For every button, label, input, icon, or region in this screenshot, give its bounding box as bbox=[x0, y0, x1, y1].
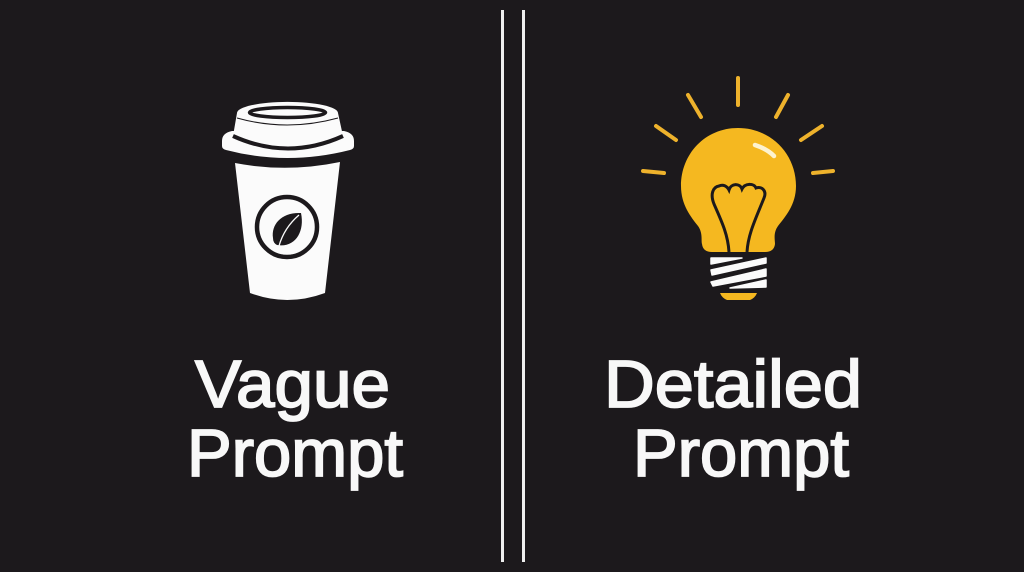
leaf vein bbox=[279, 215, 299, 246]
bulb rays bbox=[643, 78, 833, 173]
center divider: double vertical line bbox=[501, 10, 525, 562]
heading: Prompt (right): Prompt bbox=[633, 416, 849, 491]
heading: Vague: Vague bbox=[195, 347, 390, 422]
heading: Detailed: Detailed bbox=[604, 347, 862, 422]
cup brim bbox=[222, 131, 354, 158]
bulb filament bbox=[712, 184, 765, 252]
icon: coffee cup bbox=[222, 102, 354, 300]
icon: light bulb bbox=[643, 78, 833, 300]
bulb tip bbox=[720, 293, 757, 300]
icon: coffee leaf bbox=[273, 213, 302, 245]
lid rim line bbox=[237, 118, 338, 125]
cup badge ring bbox=[257, 197, 317, 257]
lid inner ring bbox=[250, 108, 326, 118]
heading: Prompt (left): Prompt bbox=[187, 416, 403, 491]
bulb glass bbox=[681, 128, 796, 252]
bulb highlight bbox=[755, 145, 774, 156]
lid lower band bbox=[233, 136, 343, 148]
cup body bbox=[235, 162, 340, 300]
bulb screw base bbox=[711, 258, 766, 288]
cup lid bbox=[233, 102, 343, 136]
